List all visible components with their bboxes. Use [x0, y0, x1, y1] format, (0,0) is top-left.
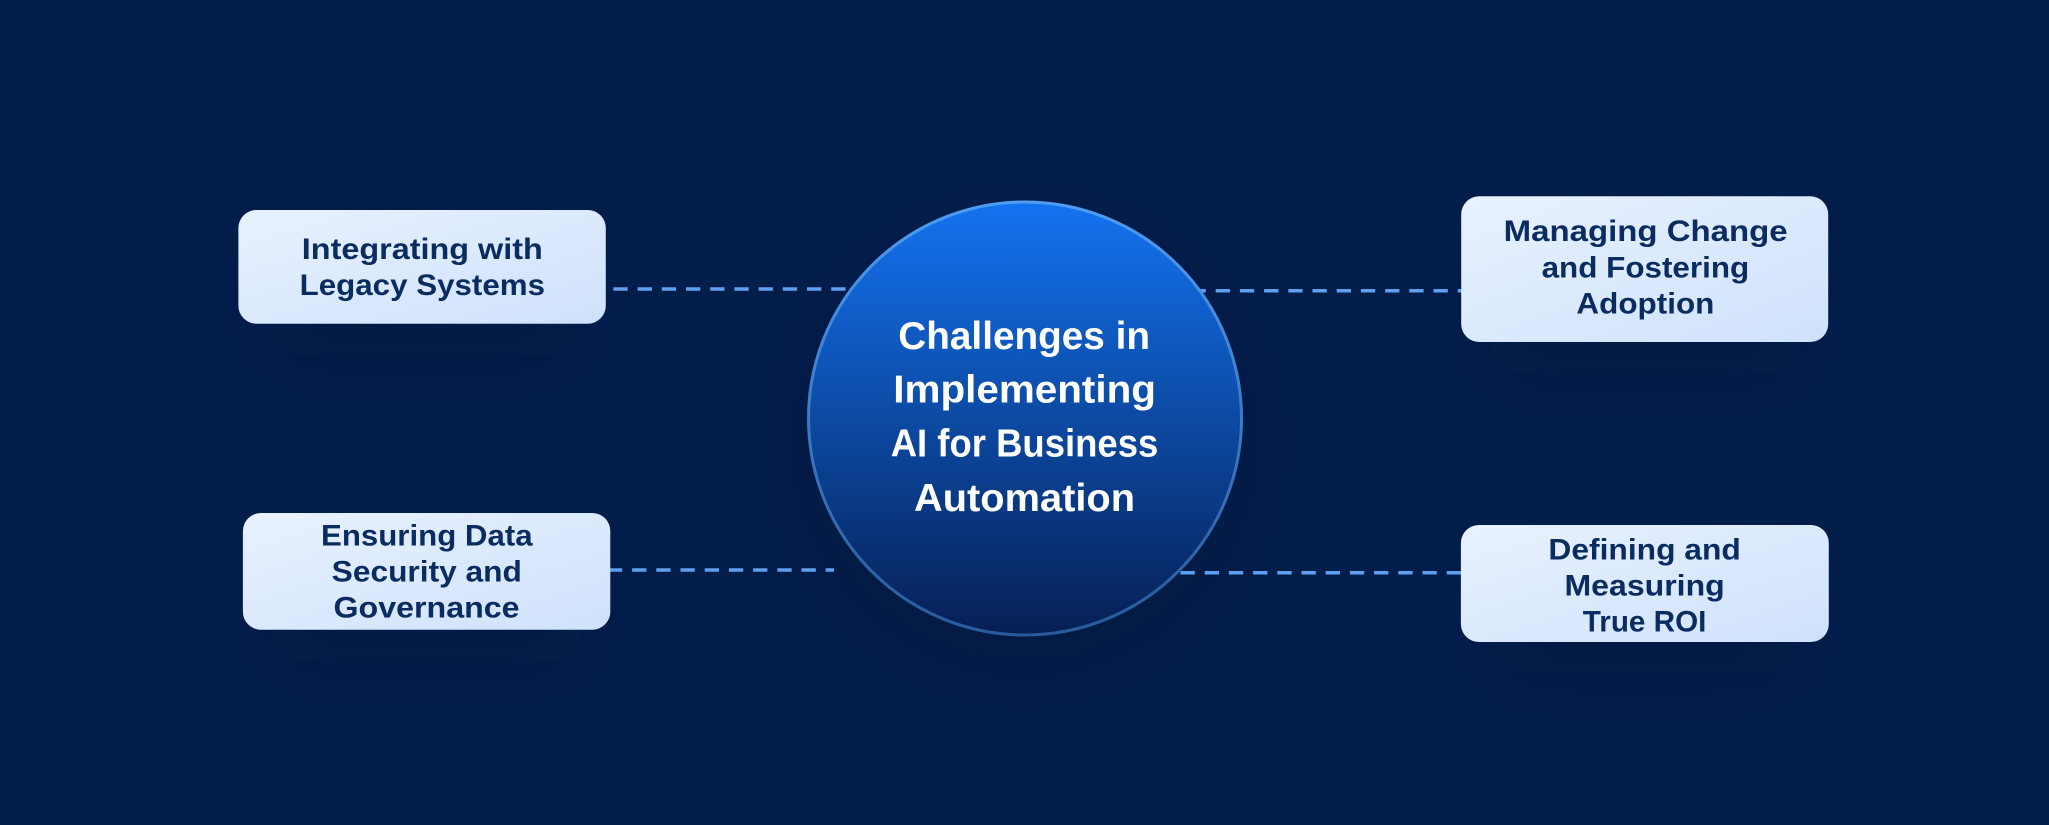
panel: Ensuring Data Security and Governance [243, 513, 610, 630]
connector: Managing Change to centre [1192, 289, 1465, 292]
panel: Managing Change and Fostering Adoption: Managing Change [1504, 215, 1788, 248]
panel: Managing Change and Fostering Adoption: Adoption [1576, 287, 1714, 320]
panel: Defining and Measuring True ROI: True ROI [1583, 605, 1706, 638]
panel: Defining and Measuring True ROI: Measuring [1564, 569, 1725, 602]
connector: Defining and Measuring ROI to centre [1180, 571, 1465, 574]
panel: Defining and Measuring True ROI: Defining and [1548, 533, 1741, 566]
centre title: Automation [914, 477, 1135, 520]
centre title: Implementing [893, 369, 1156, 412]
panel: Integrating with Legacy Systems: Legacy Systems [300, 269, 545, 302]
centre circle: Challenges in Implementing AI for Business Automation [808, 202, 1242, 635]
centre title [891, 315, 1158, 520]
panel: Managing Change and Fostering Adoption [1461, 196, 1828, 342]
panel: Defining and Measuring True ROI [1461, 525, 1829, 642]
connector: Integrating with Legacy Systems to centre [613, 287, 850, 291]
panel: Ensuring Data Security and Governance: Ensuring Data [321, 520, 533, 553]
panel: Managing Change and Fostering Adoption: and Fostering [1542, 251, 1749, 284]
centre title: AI for Business [891, 423, 1158, 466]
connector: Ensuring Data Security to centre [608, 568, 834, 572]
panel: Integrating with Legacy Systems [238, 210, 606, 324]
panel: Ensuring Data Security and Governance: Governance [334, 592, 520, 625]
centre title: Challenges in [898, 315, 1150, 358]
panel: Ensuring Data Security and Governance: Security and [332, 556, 522, 589]
panel: Integrating with Legacy Systems: Integrating with [302, 233, 543, 266]
